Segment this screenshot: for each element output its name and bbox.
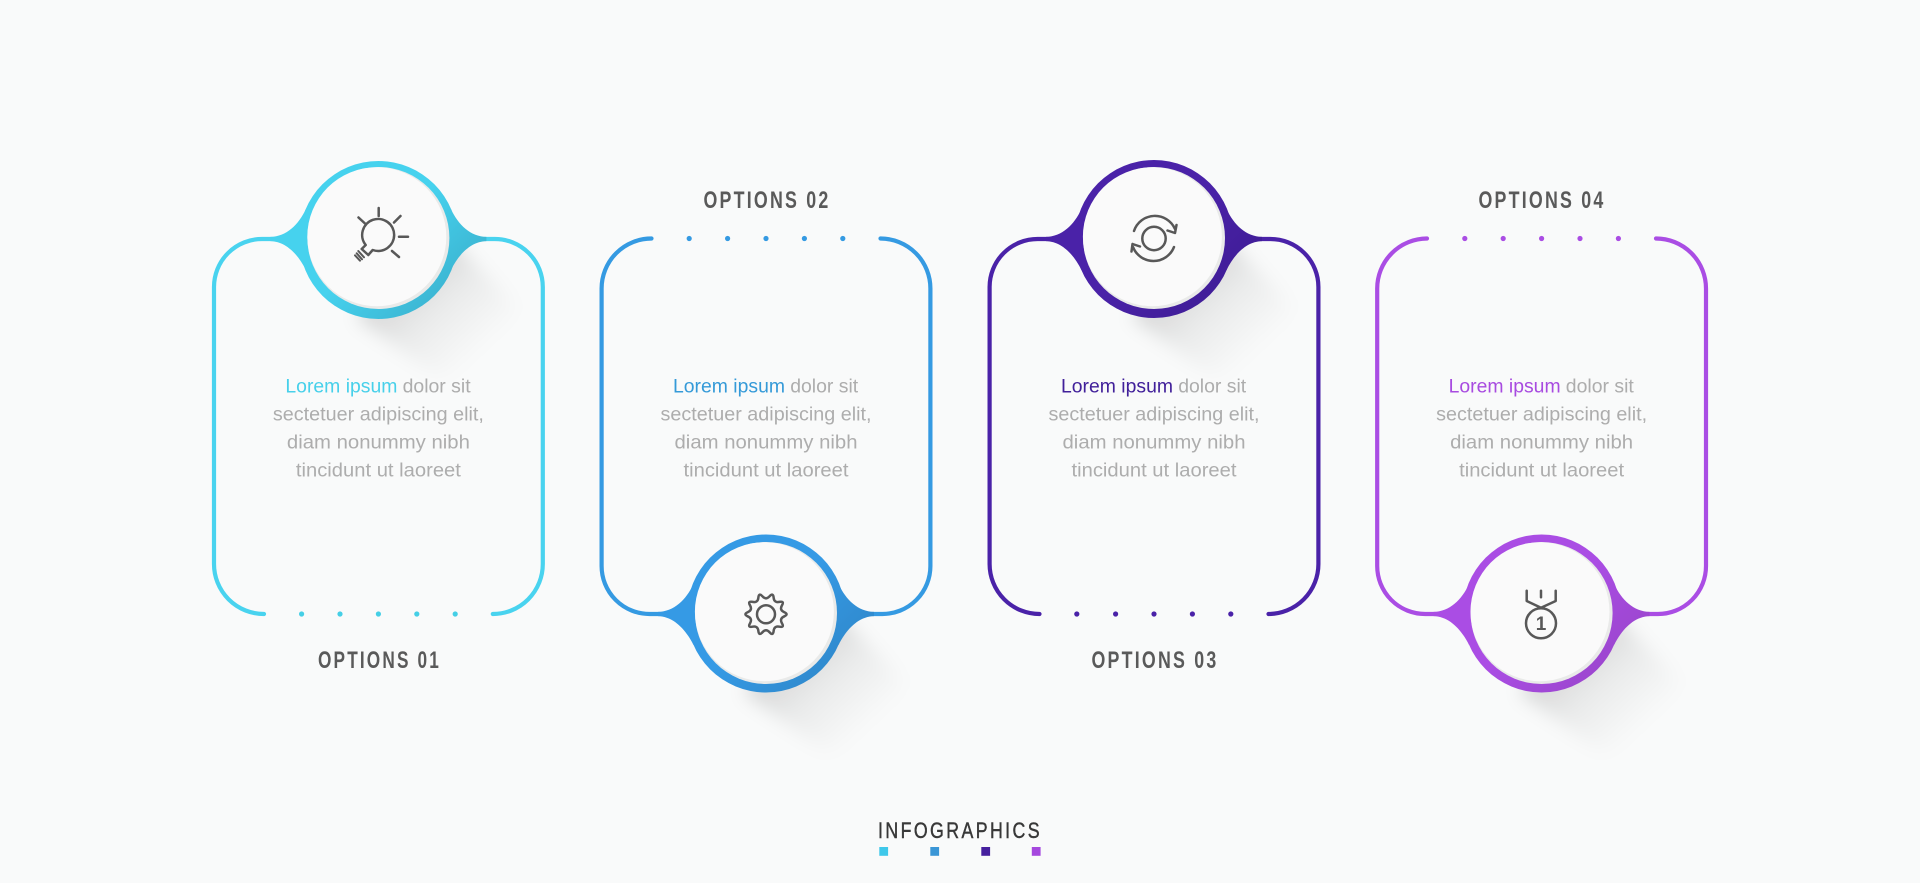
body text: dolor sit	[790, 376, 859, 398]
inner disc	[1083, 167, 1225, 309]
icon: gear	[745, 595, 787, 634]
inner disc	[307, 167, 449, 309]
icon: light bulb	[355, 208, 408, 261]
panel: options 03	[990, 160, 1318, 674]
body text: diam nonummy nibh	[674, 432, 858, 454]
body text: sectetuer adipiscing elit,	[660, 404, 872, 426]
body text: Lorem ipsum	[1061, 376, 1173, 398]
body text: Lorem ipsum	[1449, 376, 1561, 398]
body text: tincidunt ut laoreet	[1459, 460, 1625, 482]
body text: diam nonummy nibh	[1062, 432, 1246, 454]
dotted row	[1462, 236, 1621, 241]
circle badge	[658, 534, 906, 754]
dotted row	[687, 236, 845, 241]
long shadow	[1132, 227, 1294, 379]
circle badge	[1046, 160, 1294, 379]
body text: sectetuer adipiscing elit,	[1436, 404, 1647, 426]
heading: OPTIONS 04	[1478, 187, 1606, 214]
body text: dolor sit	[1566, 376, 1634, 398]
body text: sectetuer adipiscing elit,	[1048, 404, 1260, 426]
footer title: INFOGRAPHICS	[878, 818, 1042, 843]
heading: OPTIONS 03	[1092, 647, 1218, 674]
body text: dolor sit	[1178, 376, 1247, 398]
ring with fillets	[658, 534, 874, 692]
body text: tincidunt ut laoreet	[296, 460, 461, 482]
circle badge	[270, 161, 518, 379]
heading: OPTIONS 01	[318, 647, 441, 674]
long shadow	[744, 602, 906, 754]
body text: diam nonummy nibh	[1450, 432, 1633, 454]
body text: tincidunt ut laoreet	[1072, 460, 1237, 482]
icon: refresh arrows	[1132, 216, 1176, 261]
panel outline	[602, 238, 930, 614]
panel: options 01	[214, 161, 543, 674]
panel outline	[214, 239, 543, 614]
inner disc	[695, 542, 837, 684]
ring with fillets	[1046, 160, 1262, 318]
icon: medal	[1526, 591, 1556, 638]
dotted row	[1074, 611, 1233, 617]
long shadow	[1520, 602, 1682, 754]
heading: OPTIONS 02	[704, 187, 830, 214]
panel: options 04	[1377, 187, 1706, 754]
circle badge	[1434, 534, 1682, 754]
body text: dolor sit	[403, 376, 471, 398]
body text: tincidunt ut laoreet	[684, 460, 849, 482]
legend squares	[879, 847, 1041, 856]
panel outline	[1377, 238, 1706, 614]
body text: Lorem ipsum	[673, 376, 785, 398]
panel outline	[990, 239, 1318, 614]
long shadow	[356, 227, 518, 379]
body text: sectetuer adipiscing elit,	[273, 404, 484, 426]
body text: diam nonummy nibh	[287, 432, 470, 454]
icon: medal: 1	[1536, 614, 1547, 635]
dotted row	[299, 611, 458, 617]
body text: Lorem ipsum	[285, 376, 397, 398]
ring with fillets	[270, 161, 486, 319]
ring with fillets	[1434, 534, 1650, 692]
panel: options 02	[602, 187, 930, 754]
inner disc	[1471, 542, 1613, 684]
body text	[273, 376, 484, 482]
body text	[660, 376, 872, 482]
body text	[1436, 376, 1647, 482]
body text	[1048, 376, 1260, 482]
